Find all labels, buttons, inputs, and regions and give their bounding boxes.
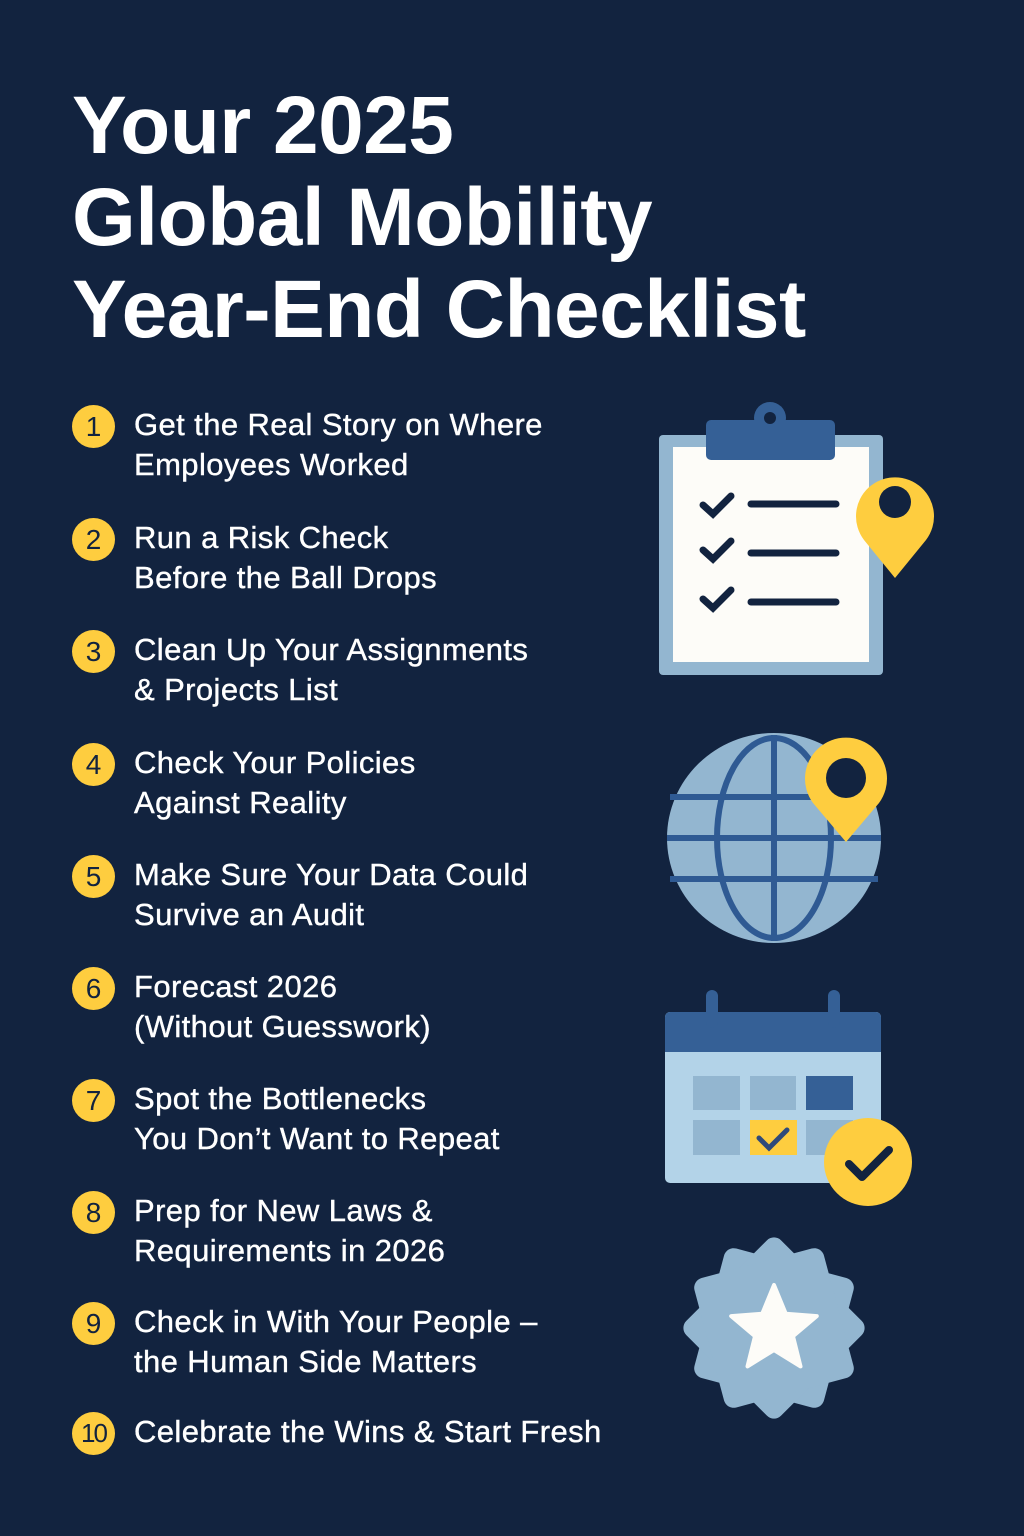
text: Prep for New Laws & xyxy=(134,1193,433,1228)
icon: pin 2 xyxy=(805,738,887,842)
item 5 xyxy=(72,855,528,932)
text: 1 xyxy=(86,411,101,442)
item 3 xyxy=(72,630,528,707)
item 8 xyxy=(72,1191,445,1268)
text: Forecast 2026 xyxy=(134,969,337,1004)
item 10 xyxy=(72,1412,602,1455)
item 4 xyxy=(72,743,416,820)
title: Your 2025 xyxy=(72,80,453,171)
icon: clipboard xyxy=(659,402,883,675)
text: the Human Side Matters xyxy=(134,1344,477,1379)
icon: pin 1 xyxy=(856,477,934,578)
text: Clean Up Your Assignments xyxy=(134,632,528,667)
text: Requirements in 2026 xyxy=(134,1233,445,1268)
icon: calendar xyxy=(665,990,881,1183)
text: 4 xyxy=(86,749,101,780)
icon: globe xyxy=(667,733,881,943)
icon: badge star xyxy=(679,1233,869,1423)
item 6 xyxy=(72,967,431,1044)
text: Against Reality xyxy=(134,785,347,820)
text: Employees Worked xyxy=(134,447,409,482)
text: Celebrate the Wins & Start Fresh xyxy=(134,1414,602,1449)
text: Get the Real Story on Where xyxy=(134,407,543,442)
item 2 xyxy=(72,518,437,595)
text: 6 xyxy=(86,973,101,1004)
text: Check in With Your People – xyxy=(134,1304,538,1339)
text: Run a Risk Check xyxy=(134,520,388,555)
text: 5 xyxy=(86,861,101,892)
title xyxy=(72,80,806,355)
text: 3 xyxy=(86,636,101,667)
item 1 xyxy=(72,405,543,482)
item 7 xyxy=(72,1079,500,1156)
text: 2 xyxy=(86,524,101,555)
title: Global Mobility xyxy=(72,172,652,263)
text: & Projects List xyxy=(134,672,338,707)
text: Make Sure Your Data Could xyxy=(134,857,528,892)
text: Spot the Bottlenecks xyxy=(134,1081,426,1116)
text: 9 xyxy=(86,1308,101,1339)
text: 7 xyxy=(86,1085,101,1116)
item 9 xyxy=(72,1302,538,1379)
text: Check Your Policies xyxy=(134,745,416,780)
text: Survive an Audit xyxy=(134,897,364,932)
title: Year-End Checklist xyxy=(72,264,806,355)
text: 10 xyxy=(81,1418,106,1448)
text: 8 xyxy=(86,1197,101,1228)
icon: check circle xyxy=(824,1118,912,1206)
text: (Without Guesswork) xyxy=(134,1009,431,1044)
text: You Don’t Want to Repeat xyxy=(134,1121,500,1156)
text: Before the Ball Drops xyxy=(134,560,437,595)
